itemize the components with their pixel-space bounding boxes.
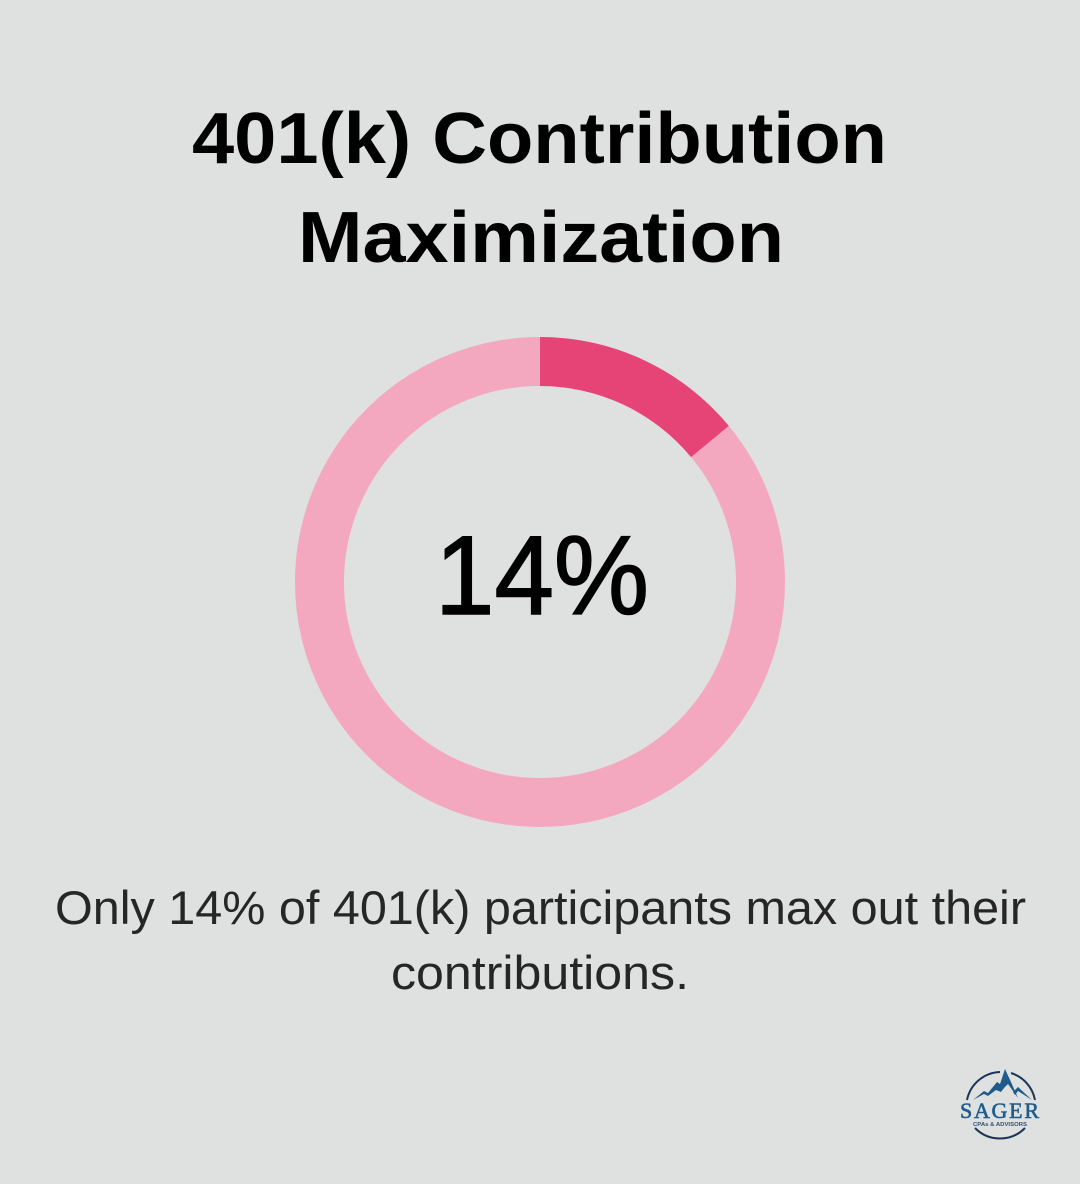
title: 401(k) Contribution [192,99,887,179]
title [192,99,887,278]
logo: Sager CPAs and Advisors [960,1069,1039,1139]
description text: contributions. [391,946,689,999]
logo ring arcs [967,1072,1000,1100]
logo mountain [973,1069,1018,1100]
donut remainder ring [320,362,760,802]
logo tagline: CPAs & ADVISORS [973,1122,1027,1128]
description text: Only 14% of 401(k) participants max out their [55,881,1026,934]
title: Maximization [298,198,784,278]
donut chart: 14 percent [320,337,760,802]
description text [55,881,1026,999]
logo wordmark: SAGER [960,1098,1039,1123]
donut highlighted segment [540,337,729,457]
donut center value: 14% [435,513,649,638]
